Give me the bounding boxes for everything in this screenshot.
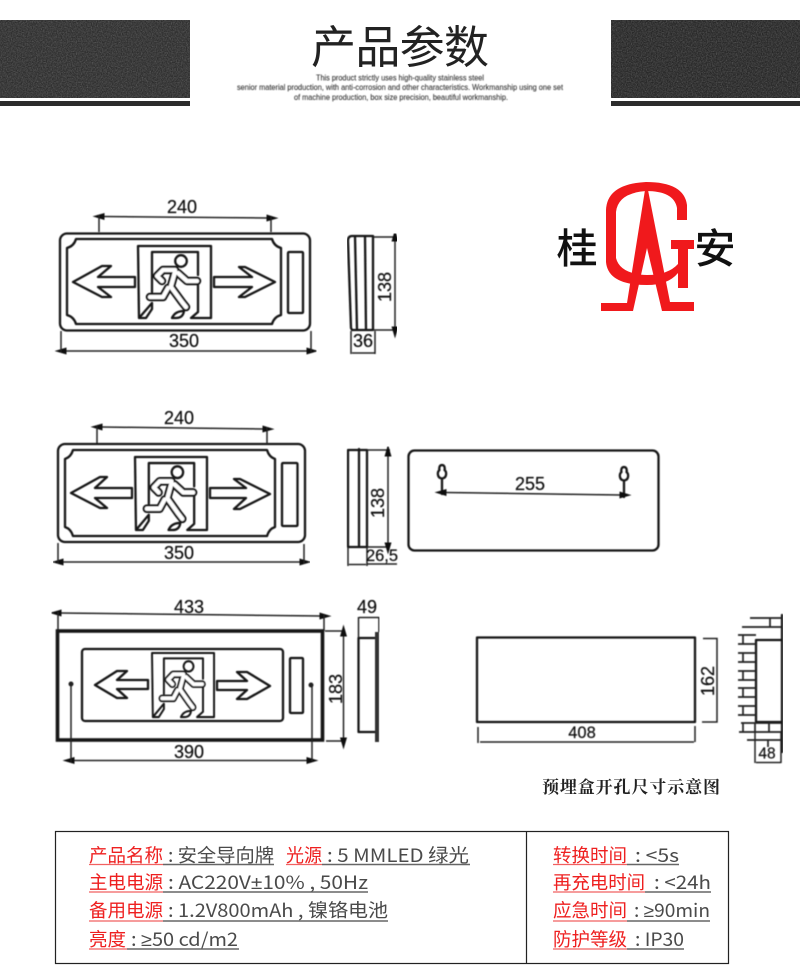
spec rows: left column: : ≥50 cd/m2: [131, 926, 238, 952]
left arrow: [71, 477, 132, 508]
drawing: opening front view: [477, 638, 718, 743]
title: 产品参数: [311, 22, 489, 73]
dimension 138: 138: [368, 488, 388, 518]
drawing: recessed sign front view: [58, 597, 346, 762]
dimension 183: 183: [326, 674, 346, 704]
dimension 390: 390: [174, 742, 204, 762]
subtitle text: senior material production, with anti-corrosion and other characteristics. Workmanship using one set: [237, 83, 564, 92]
brick courses: [738, 618, 782, 747]
drawing: wall-mounted sign front view: [60, 197, 311, 352]
spec rows: right column: : <5s: [635, 842, 679, 868]
logo: 桂安 red emblem: 安: [694, 226, 736, 272]
spec rows: right column: [553, 842, 711, 952]
left arrow: [73, 266, 135, 297]
spec rows: left column: 主电电源: [89, 869, 163, 895]
dimension 49: 49: [357, 597, 377, 617]
dimension 48: [755, 732, 781, 763]
sign casing: [58, 444, 305, 542]
dimension 255: 255: [515, 474, 545, 494]
dimension 350: [61, 331, 311, 352]
dimension 408: [478, 724, 695, 743]
dimension 350: 350: [169, 331, 199, 351]
exit door and running figure: [152, 653, 214, 717]
specification table: [56, 832, 728, 964]
spec rows: right column: 转换时间: [553, 842, 627, 868]
dimension 162: 162: [698, 666, 718, 696]
spec rows: left column: 备用电源: [89, 897, 163, 923]
keyhole right: [620, 467, 628, 497]
dimension 48: 48: [758, 746, 776, 762]
right arrow: [214, 267, 275, 297]
spec rows: right column: : ≥90min: [634, 897, 710, 923]
spec rows: right column: : IP30: [635, 926, 684, 952]
dimension 433: 433: [174, 597, 204, 617]
header band: right dark panel: [611, 20, 800, 106]
battery window: [288, 252, 303, 313]
spec rows: left column: 亮度: [89, 926, 126, 952]
inner panel: [82, 649, 283, 721]
dimension 183: [325, 631, 346, 741]
spec rows: left column: : AC220V ±10% , 50Hz: [168, 869, 368, 895]
outer frame: [58, 631, 322, 740]
spec rows: left column: [89, 842, 470, 952]
dimension 408: 408: [568, 724, 596, 742]
dimension 350: [58, 543, 304, 564]
drawing: wall cavity section: [738, 615, 782, 763]
spec rows: left column: : 5 MMLED 绿光: [327, 842, 469, 868]
subtitle text: of machine production, box size precision, beautiful workmanship.: [294, 93, 508, 102]
header band: left dark panel: [0, 20, 190, 106]
battery window: [282, 463, 298, 526]
dimension 162: [698, 638, 718, 722]
spec rows: right column: 应急时间: [553, 897, 627, 923]
logo: 桂安 red emblem: [556, 182, 736, 311]
dimension 240: 240: [164, 408, 194, 428]
dimension 49: [357, 597, 379, 638]
right arrow: [217, 672, 270, 699]
spec rows: left column: : 1.2V800mAh , 镍铬电池: [168, 897, 388, 923]
sign casing: [60, 234, 310, 330]
dimension 36: 36: [353, 331, 373, 351]
spec rows: left column: 光源: [286, 842, 322, 868]
dimension 433: [58, 597, 324, 631]
mounting points: [68, 682, 314, 688]
right arrow: [210, 479, 270, 509]
drawing: recessed sign side view: [357, 597, 379, 742]
subtitle text: [237, 74, 564, 102]
logo: 桂安 red emblem: 桂: [556, 226, 598, 272]
drawing: rear mounting plate: [408, 450, 658, 550]
sign frame: [65, 450, 275, 536]
spec rows: right column: 再充电时间: [553, 869, 645, 895]
dimension 240: 240: [167, 197, 197, 217]
spec rows: left column: 产品名称: [89, 842, 163, 868]
spec rows: right column: 防护等级: [553, 926, 627, 952]
spec rows: right column: : <24h: [654, 869, 711, 895]
spec rows: left column: : 安全导向牌: [168, 842, 274, 868]
dimension 390: [71, 684, 312, 762]
left arrow: [95, 671, 148, 698]
dimension 350: 350: [164, 543, 194, 563]
battery window: [290, 658, 303, 713]
dimension 138: 138: [375, 272, 395, 302]
drawing: wall-mounted sign side view: [348, 236, 396, 354]
exit door and running figure: [135, 457, 207, 530]
dimension 26,5: 26,5: [366, 547, 398, 565]
subtitle text: This product strictly uses high-quality stainless steel: [316, 74, 484, 82]
exit door and running figure: [138, 246, 211, 318]
dimension 240: [99, 197, 271, 232]
caption: opening diagram: 预埋盒开孔尺寸示意图: [542, 777, 720, 797]
dimension 240: [97, 408, 267, 444]
sign frame: [67, 239, 281, 324]
drawing: surface-mounted sign side view: [348, 449, 398, 566]
keyhole left: [438, 465, 446, 494]
drawing: surface-mounted sign front view: [58, 408, 305, 564]
